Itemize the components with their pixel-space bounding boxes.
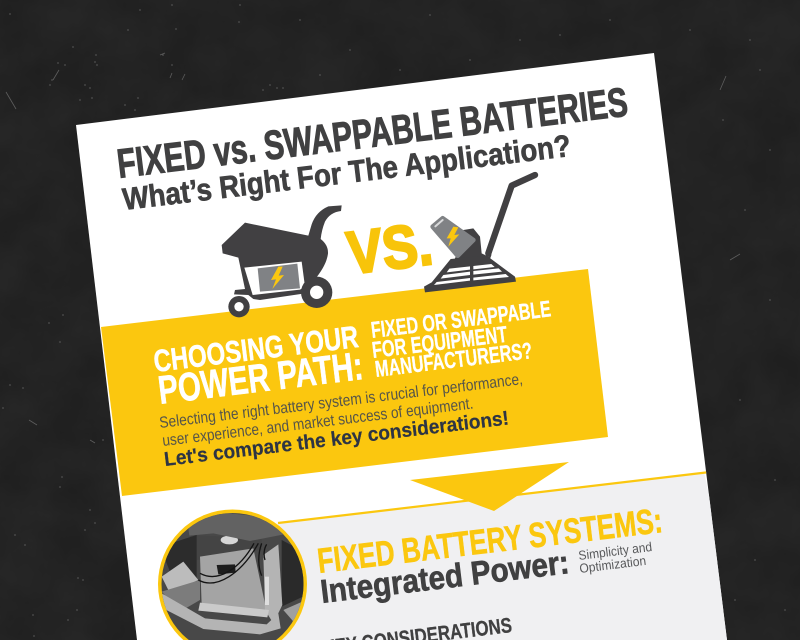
- title: What’s Right For The Application?: [121, 128, 573, 217]
- banner body text: [158, 371, 524, 471]
- panel: yellow intro banner: [101, 269, 608, 496]
- icon: power trowel with swappable battery: [424, 175, 535, 292]
- panel: grey fixed battery section: [276, 471, 727, 640]
- section subheading: integrated power: Integrated Power:: [318, 543, 571, 610]
- title: FIXED vs. SWAPPABLE BATTERIES: [114, 79, 630, 187]
- banner subheading: fixed or swappable: FOR EQUIPMENT: [370, 321, 509, 363]
- section tagline: [578, 539, 653, 576]
- banner heading: choosing your power path: CHOOSING YOUR: [152, 319, 360, 379]
- icon: wheelbarrow with fixed battery: [222, 205, 342, 317]
- title: [114, 79, 630, 217]
- banner subheading: fixed or swappable: FIXED OR SWAPPABLE: [369, 295, 552, 343]
- section heading: fixed battery systems: FIXED BATTERY SYSTEMS:: [315, 501, 665, 581]
- banner subheading: fixed or swappable: [369, 295, 552, 382]
- heading: VS.: VS.: [343, 210, 436, 287]
- panel: white poster sheet: [76, 53, 727, 640]
- section tagline: Simplicity and: [578, 539, 653, 563]
- section tagline: Optimization: [579, 553, 647, 576]
- banner body text: Let's compare the key considerations!: [163, 407, 510, 471]
- banner body text: Selecting the right battery system is crucial for performance,: [158, 371, 524, 432]
- banner body text: user experience, and market success of equipment.: [161, 395, 474, 450]
- photo: fixed battery in machine: [158, 510, 307, 640]
- arrow: down triangle: [410, 462, 569, 511]
- banner heading: choosing your power path: POWER PATH:: [156, 344, 366, 413]
- banner heading: choosing your power path: [152, 319, 366, 413]
- banner subheading: fixed or swappable: MANUFACTURERS?: [373, 337, 533, 382]
